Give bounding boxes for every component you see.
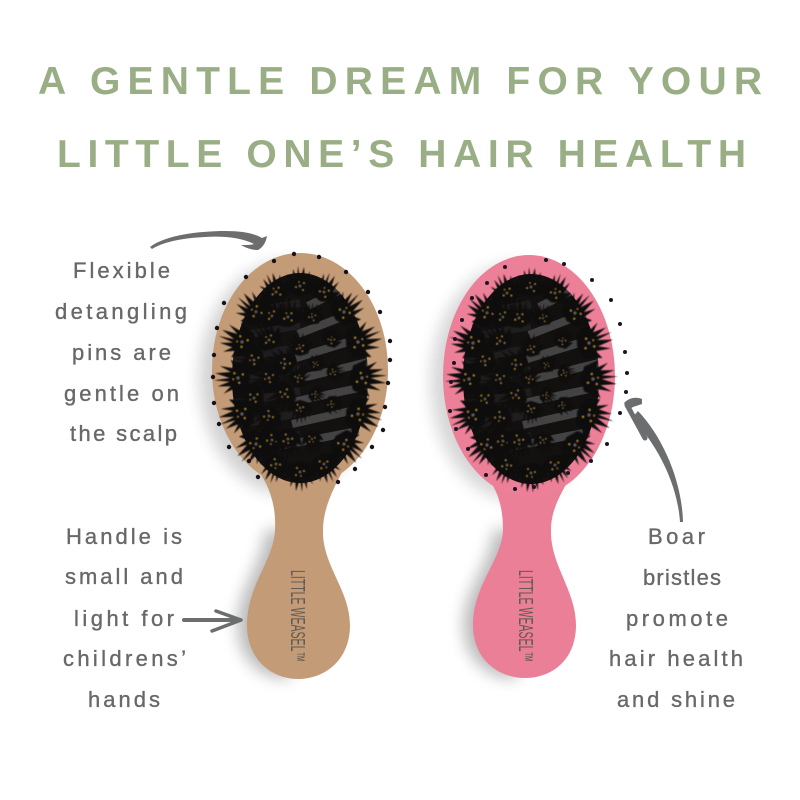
pink head	[443, 255, 615, 497]
tan brand label: LITTLE WEASEL™	[286, 570, 308, 662]
text: handle: hands	[88, 687, 160, 712]
tan detangling pins	[211, 252, 392, 484]
text: handle: small and	[65, 564, 183, 589]
pink handle	[473, 470, 576, 678]
text: flexible pins	[55, 258, 187, 446]
text: boar bristles: bristles	[643, 565, 721, 590]
arrow: to boar bristles	[624, 398, 683, 522]
text: flexible pins: detangling	[55, 299, 187, 324]
text: boar bristles: hair health	[609, 646, 743, 671]
text: handle: childrens’	[63, 646, 186, 671]
text: boar bristles: and shine	[617, 687, 735, 712]
text: boar bristles	[609, 524, 743, 712]
arrow: to detangling pins	[150, 231, 267, 250]
text: flexible pins: pins are	[72, 340, 171, 365]
pink cushion pad	[461, 274, 599, 484]
arrow: to handle	[184, 611, 241, 631]
pink bristle tufts	[444, 267, 619, 493]
tan cushion pad	[230, 273, 368, 483]
text: flexible pins: the scalp	[70, 421, 177, 446]
text: flexible pins: Flexible	[73, 258, 170, 283]
brush: pink	[431, 255, 629, 678]
tan pad highlights	[280, 290, 368, 446]
title: LITTLE ONE’S HAIR HEALTH	[57, 133, 746, 176]
text: handle: Handle is	[66, 524, 182, 549]
text: handle: light for	[74, 606, 174, 631]
text: flexible pins: gentle on	[64, 381, 179, 406]
tan head	[212, 253, 388, 487]
tan bristle tufts	[213, 266, 388, 492]
pink brand label: LITTLE WEASEL™	[514, 570, 536, 662]
text: boar bristles: promote	[626, 606, 728, 631]
tan handle	[247, 465, 350, 679]
brush: tan	[200, 252, 392, 679]
title: A GENTLE DREAM FOR YOUR	[38, 60, 762, 103]
text: boar bristles: Boar	[648, 524, 705, 549]
pink detangling pins	[448, 258, 629, 491]
pink pad highlights	[511, 291, 599, 447]
title	[38, 60, 762, 176]
text: handle	[63, 524, 186, 712]
